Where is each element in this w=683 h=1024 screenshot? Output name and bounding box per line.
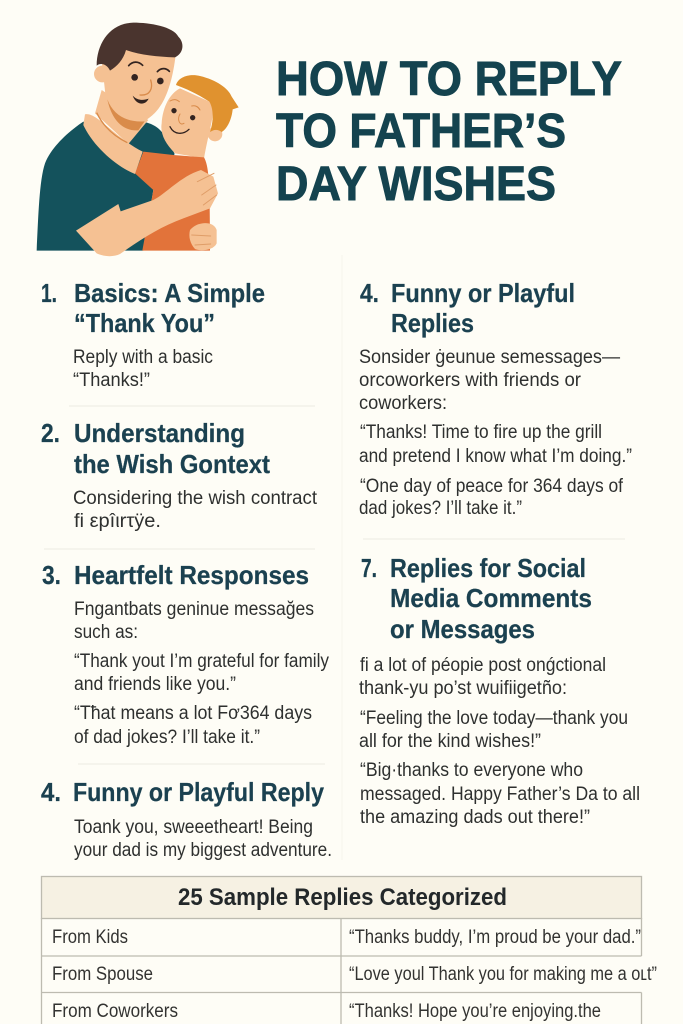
heading: section 1: 1.	[41, 278, 57, 308]
text: section 4 right body: “Thanks! Time to fire up the grill	[360, 422, 602, 443]
title	[276, 53, 622, 211]
section 1: basics	[41, 278, 265, 391]
title: HOW TO REPLY	[276, 53, 622, 106]
text: section 7 body: the amazing dads out there!”	[360, 807, 590, 828]
text: section 1 body	[73, 347, 213, 391]
heading: section 4 left: 4.	[41, 777, 61, 807]
table row: from coworkers: “Thanks! Hope you’re enjoying.the	[349, 1001, 601, 1022]
text: section 3 body	[74, 599, 329, 748]
text: section 2 body: ﬁ εpîιrτÿe.	[74, 511, 161, 532]
heading: section 4 right: Funny or Playful	[391, 278, 575, 308]
table row: from kids: From Kids	[52, 927, 128, 948]
heading: section 1: “Thank You”	[74, 308, 215, 338]
title: TO FATHER’S	[276, 105, 566, 158]
text: section 4 left body: your dad is my biggest adventure.	[74, 840, 332, 861]
section 7: replies for social media	[359, 553, 640, 828]
text: section 3 body: “Thank yout I’m grateful for family	[74, 651, 329, 672]
text: section 3 body: and friends like you.”	[74, 674, 236, 695]
text: section 3 body: of dad jokes? I’ll take it.”	[74, 727, 260, 748]
section 2: understanding the wish context	[41, 418, 318, 532]
text: section 4 right body	[359, 347, 632, 519]
text: section 4 right body: Sonsider ġeunue semessages—	[359, 347, 620, 368]
illustration: father hugging son	[37, 23, 239, 256]
text: section 3 body: such as:	[74, 622, 138, 643]
text: section 4 right body: “One day of peace for 364 days of	[360, 476, 624, 497]
text: section 3 body: Fngantbats geninue messağes	[74, 599, 314, 620]
heading: section 7	[361, 553, 592, 644]
section 4: funny or playful reply	[41, 777, 332, 861]
heading: section 4 right	[360, 278, 575, 338]
text: section 7 body	[359, 655, 640, 828]
heading: section 2: the Wish Gontext	[74, 449, 270, 479]
heading: section 3: Heartfelt Responses	[74, 560, 309, 590]
table header: 25 Sample Replies Categorized	[178, 884, 507, 911]
section 3: heartfelt responses	[42, 560, 329, 748]
heading: section 2: Understanding	[74, 418, 245, 448]
title: DAY WISHES	[276, 158, 556, 211]
table row: from coworkers	[52, 1001, 601, 1022]
table row: from spouse	[52, 964, 657, 985]
table row: from kids	[52, 927, 641, 948]
text: section 2 body: Considering the wish contract	[73, 488, 318, 509]
heading: section 7: 7.	[361, 553, 377, 583]
heading: section 4 right: Replies	[391, 308, 474, 338]
text: section 7 body: messaged. Happy Father’s Da to all	[360, 784, 640, 805]
heading: section 7: Media Comments	[390, 583, 592, 613]
heading: section 3: 3.	[42, 560, 61, 590]
section 4 right: funny or playful replies	[359, 278, 632, 519]
table row: from coworkers: From Coworkers	[52, 1001, 178, 1022]
text: section 7 body: “Feeling the love today—thank you	[360, 708, 628, 729]
heading: section 2	[41, 418, 270, 479]
heading: section 4 right: 4.	[360, 278, 379, 308]
heading: section 7: Replies for Social	[390, 553, 586, 583]
heading: section 1: Basics: A Simple	[74, 278, 265, 308]
heading: section 7: or Messages	[390, 614, 535, 644]
table: 25 sample replies	[42, 876, 657, 1024]
text: section 4 right body: coworkers:	[359, 393, 447, 414]
text: section 4 left body: Toank you, sweeetheart! Being	[74, 817, 313, 838]
text: section 7 body: “Big·thanks to everyone who	[360, 760, 583, 781]
text: section 4 right body: dad jokes? I’ll take it.”	[359, 498, 522, 519]
text: section 4 right body: and pretend I know what I’m doing.”	[359, 446, 632, 467]
text: section 7 body: thank-yu po’st wuifiigetño:	[359, 678, 567, 699]
text: section 1 body: Reply with a basic	[73, 347, 213, 368]
text: section 1 body: “Thanks!”	[73, 370, 150, 391]
text: section 7 body: all for the kind wishes!”	[359, 731, 541, 752]
table header	[42, 876, 642, 918]
text: section 4 left body	[74, 817, 332, 861]
heading: section 1	[41, 278, 265, 338]
text: section 4 right body: orcoworkers with friends or	[359, 370, 582, 391]
text: section 2 body	[73, 488, 318, 532]
text: section 3 body: “Tħat means a lot Fơ364 days	[74, 703, 312, 724]
text: section 7 body: ﬁ a lot of péopie post onǵctional	[360, 655, 606, 676]
heading: section 2: 2.	[41, 418, 60, 448]
table row: from spouse: From Spouse	[52, 964, 153, 985]
table row: from kids: “Thanks buddy, I’m proud be your dad.”	[349, 927, 641, 948]
heading: section 4 left: Funny or Playful Reply	[73, 777, 324, 807]
